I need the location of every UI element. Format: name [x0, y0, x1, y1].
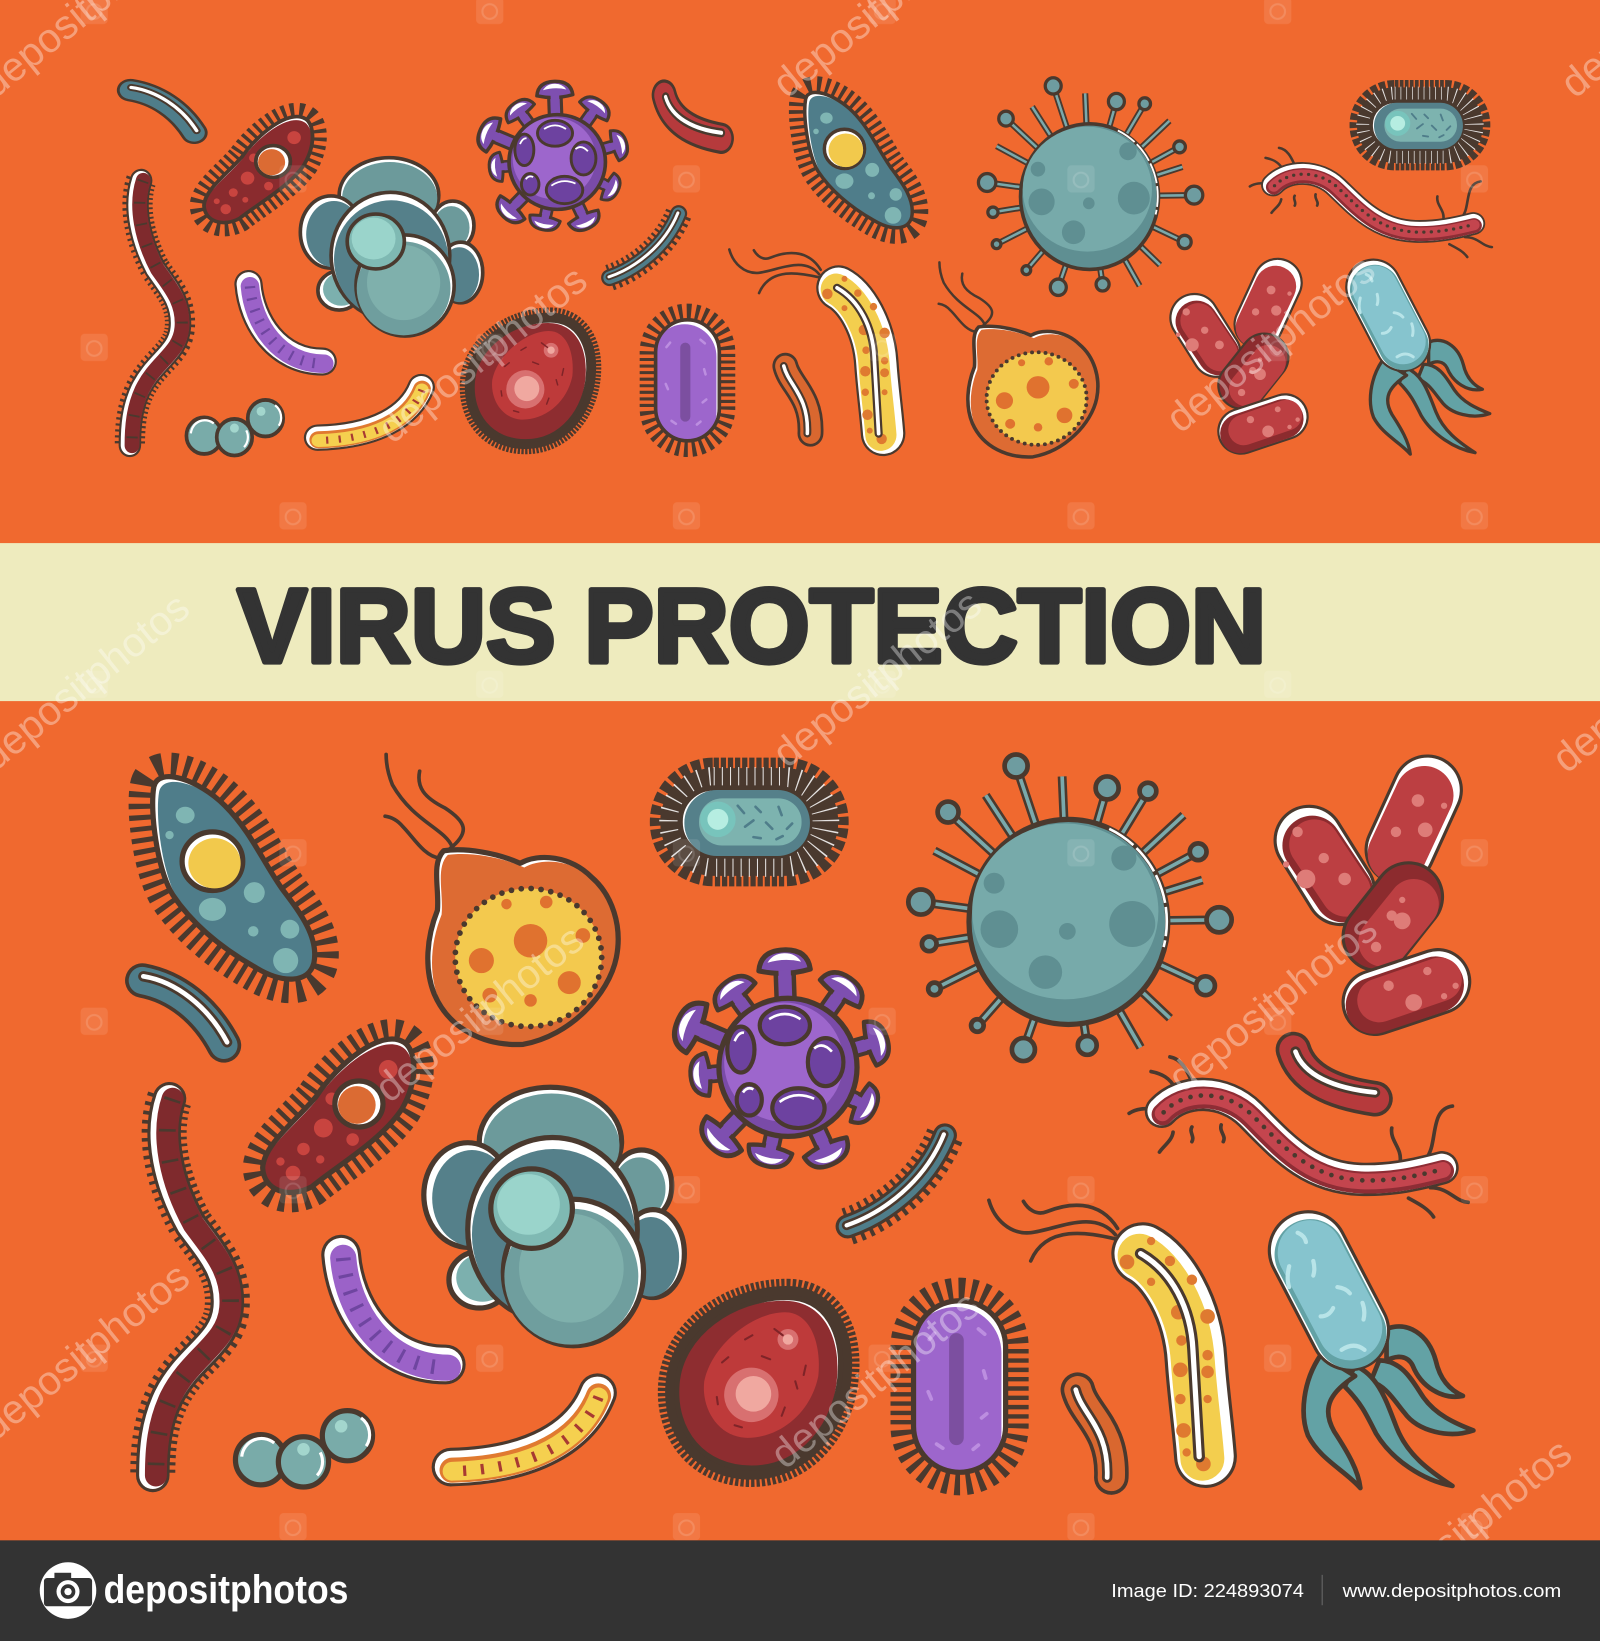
icon: big teal spiked sphere: [908, 754, 1232, 1061]
icon: orange rod small: [784, 366, 811, 433]
text watermarks: depositphotos: [369, 256, 596, 452]
text watermarks: depositphotos: [1159, 905, 1386, 1101]
icon: teal rod small: [130, 87, 197, 133]
icon: pear-shaped cell small: [939, 262, 1101, 460]
text watermarks: depositphotos: [764, 580, 990, 776]
panel: lower microbes: [142, 754, 1473, 1488]
text watermarks: depositphotos: [366, 915, 592, 1111]
image id: Image ID: 224893074: [1111, 1580, 1304, 1601]
icon: yellow curved rod: [451, 1393, 599, 1471]
text watermarks: depositphotos: [762, 1282, 988, 1477]
icon: teal spiked sphere small: [978, 78, 1203, 295]
icon: purple bent rod: [341, 1255, 448, 1368]
icon: red pills small: [1176, 283, 1300, 437]
icon: red hairy egg cell: [674, 1298, 841, 1471]
footer logo icon: [40, 1562, 96, 1619]
icon: red rod small: [664, 95, 721, 138]
icon: red egg cell small: [471, 321, 588, 443]
panel: upper microbes: [130, 78, 1492, 460]
icon: red paramecium small: [203, 117, 313, 226]
icon: caterpillar small: [609, 213, 679, 278]
icon: dark hairy rod small: [1371, 101, 1469, 149]
icon: brown worm small: [130, 181, 182, 445]
icon: teal paramecium small: [805, 92, 916, 231]
icon: blue tentacled bacterium small: [1359, 274, 1490, 454]
icon: purple hairy rod: [909, 1301, 1006, 1479]
icon: purple virus small: [473, 81, 631, 235]
icon: red paramecium: [262, 1039, 414, 1198]
icon: blue tentacled bacterium: [1288, 1233, 1473, 1488]
icon: three balls small: [186, 400, 283, 455]
icon: purple bent rod small: [248, 284, 324, 364]
icon: small orange rod: [1076, 1390, 1111, 1478]
icon: yellow curved rod small: [318, 387, 422, 441]
icon: yellow flagellate small: [729, 250, 890, 444]
icon: teal paramecium: [153, 777, 320, 984]
icon: cell cluster small: [300, 158, 483, 336]
icon: pear-shaped flagellate cell: [385, 754, 622, 1049]
icon: red pill bacteria: [1283, 790, 1459, 1011]
icon: dark caterpillar microbe: [847, 1134, 945, 1226]
icon: brown worm: [153, 1099, 231, 1475]
footer logo wordmark: depositphotos: [104, 1568, 348, 1612]
icon: three teal balls: [235, 1411, 373, 1487]
icon: purple virus: [667, 949, 893, 1174]
website url: www.depositphotos.com: [1341, 1580, 1561, 1601]
icon: yellow flagellate rod: [989, 1200, 1215, 1471]
icon: purple hairy rod small: [653, 320, 719, 445]
text watermarks: depositphotos: [1354, 1429, 1580, 1625]
icon: dark hairy rod with teal core: [680, 788, 818, 856]
title: VIRUS PROTECTION: [238, 568, 1266, 685]
icon: red worm: [1129, 1057, 1468, 1217]
title band: [0, 543, 1600, 701]
text watermarks: depositphotos: [1157, 246, 1383, 441]
icon: red worm small: [1250, 148, 1492, 257]
icon: teal rod: [142, 976, 227, 1045]
footer bar: [0, 1540, 1600, 1641]
icon: teal cell cluster: [424, 1087, 684, 1346]
icon: small red rod: [1293, 1050, 1375, 1099]
